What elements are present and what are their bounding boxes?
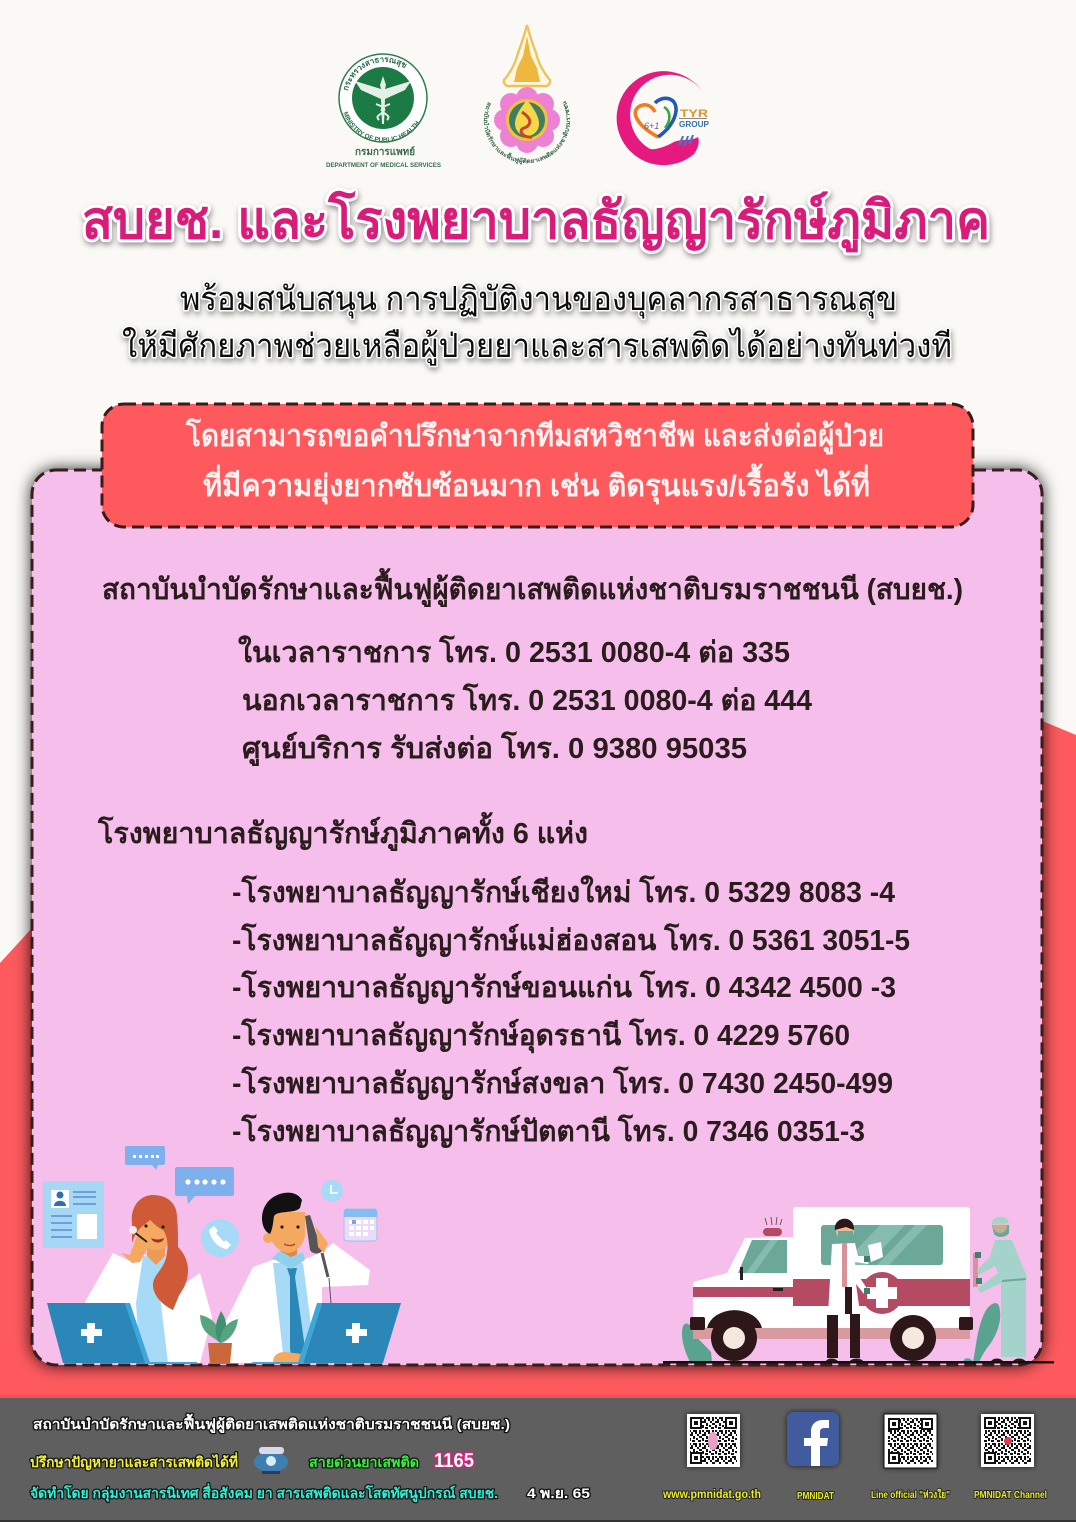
text block: hospital phones: -โรงพยาบาลธัญญารักษ์ปัตตานี โทร. 0 7346 0351-3 [232,1113,865,1149]
footer: date: 4 พ.ย. 65 [527,1485,590,1501]
text block: hospital phones: -โรงพยาบาลธัญญารักษ์เชียงใหม่ โทร. 0 5329 8083 -4 [232,874,895,910]
plant [200,1311,238,1364]
subtitle: ให้มีศักยภาพช่วยเหลือผู้ป่วยยาและสารเสพติดได้อย่างทันท่วงที [122,327,952,366]
subtitle: พร้อมสนับสนุน การปฏิบัติงานของบุคลากรสาธารณสุข [180,280,897,319]
label: line official: Line official "ห่วงใย" [871,1488,950,1501]
callout: consult banner [102,404,973,527]
laptop right [252,1303,401,1364]
label: website: www.pmnidat.go.th [662,1487,761,1501]
wheels [690,1310,973,1361]
text block: hospital phones: -โรงพยาบาลธัญญารักษ์แม่ฮ่องสอน โทร. 0 5361 3051-5 [232,922,910,958]
door handle [973,1253,978,1287]
footer bar [0,1395,1076,1522]
nurse in scrubs [963,1217,1027,1363]
heading: institute: สถาบันบำบัดรักษาและฟื้นฟูผู้ติดยาเสพติดแห่งชาติบรมราชชนนี (สบยช.) [102,567,963,607]
title: สบยช. และโรงพยาบาลธัญญารักษ์ภูมิภาค [82,189,990,253]
logo: ministry of public health: กรมการแพทย์ [355,146,415,158]
icon: clock [321,1180,343,1202]
logo: ministry of public health: กระทรวงสาธารณสุข [344,57,407,91]
footer: consult line: ปรึกษาปัญหายาและสารเสพติดได้ที่ [30,1452,238,1471]
icon: profile card [43,1181,104,1248]
footer: hotline number: 1165 [434,1450,474,1472]
doctor with clipboard [825,1219,883,1363]
footer: organization name: สถาบันบำบัดรักษาและฟื้นฟูผู้ติดยาเสพติดแห่งชาติบรมราชชนนี (สบยช.) [33,1413,510,1433]
qr: channel [981,1414,1034,1467]
illustration: ambulance [663,1207,1054,1364]
qr: website [687,1414,740,1467]
logo: tyr group: GROUP [679,120,710,129]
callout: consult banner: ที่มีความยุ่งยากซับซ้อนมาก เช่น ติดรุนแรง/เรื้อรัง ได้ที่ [203,463,870,505]
icon: telephone [254,1447,288,1474]
qr: line official [884,1414,937,1468]
callout: consult banner: โดยสามารถขอคำปรึกษาจากทีมสหวิชาชีพ และส่งต่อผู้ป่วย [185,417,884,455]
panel: contacts [32,470,1042,1365]
logo: ministry of public health: DEPARTMENT OF MEDICAL SERVICES [326,163,441,169]
laptop left [47,1303,197,1364]
text block: hospital phones: -โรงพยาบาลธัญญารักษ์อุดรธานี โทร. 0 4229 5760 [232,1017,850,1053]
icon: speech bubbles [125,1146,234,1204]
woman doctor [85,1195,212,1363]
bush behind ambulance [682,1323,712,1362]
logo: ministry of public health: MINISTRY OF PUBLIC HEALTH [344,112,420,142]
footer: publisher: จัดทำโดย กลุ่มงานสารนิเทศ สื่อสังคม ยา สารเสพติดและโสตทัศนูปกรณ์ สบยช. [30,1483,498,1502]
text block: institute phones: นอกเวลาราชการ โทร. 0 2531 0080-4 ต่อ 444 [242,682,812,717]
text block: institute phones: ในเวลาราชการ โทร. 0 2531 0080-4 ต่อ 335 [238,634,790,669]
logo: pmnidat lotus: สถาบันบำบัดรักษาและฟื้นฟูผู้ติดยาเสพติดแห่งชาติบรมราชชนนี [484,101,570,164]
logo: tyr group: TYR [680,108,708,120]
icon: facebook [787,1412,839,1466]
logo: pmnidat lotus [484,24,570,164]
footer: hotline label: สายด่วนยาเสพติด [309,1454,419,1470]
logos row [326,24,710,169]
text block: institute phones [238,634,812,766]
logo: tyr group: 6+1 [644,121,659,131]
ambulance body [693,1207,970,1339]
logo: ministry of public health [326,53,441,169]
text block: hospital phones: -โรงพยาบาลธัญญารักษ์ขอนแก่น โทร. 0 4342 4500 -3 [232,969,896,1005]
text block: institute phones: ศูนย์บริการ รับส่งต่อ โทร. 0 9380 95035 [242,730,747,766]
illustration: call center doctors [43,1146,401,1364]
text block: hospital phones [232,874,910,1149]
logo: tyr group [617,71,710,165]
ground line [663,1361,1054,1364]
icon: phone circle [201,1219,239,1257]
subtitle [122,280,952,366]
label: channel: PMNIDAT Channel [974,1490,1047,1501]
label: facebook: PMNIDAT [797,1491,834,1502]
heading: regional hospitals: โรงพยาบาลธัญญารักษ์ภูมิภาคทั้ง 6 แห่ง [97,811,588,851]
red background shape [0,600,1076,1522]
man doctor [223,1193,370,1363]
icon: calendar [344,1209,377,1241]
text block: hospital phones: -โรงพยาบาลธัญญารักษ์สงขลา โทร. 0 7430 2450-499 [232,1065,893,1101]
